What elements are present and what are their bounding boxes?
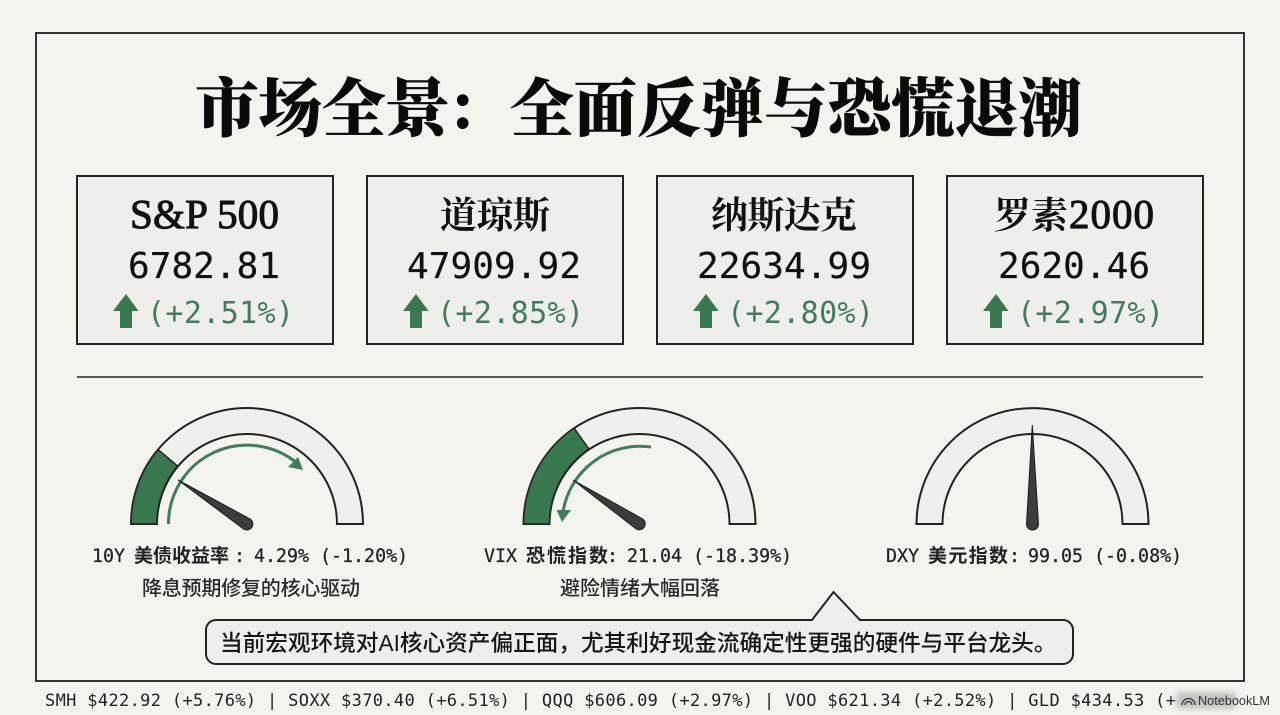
card: Nasdaq xyxy=(657,176,913,344)
card: Dow Jones xyxy=(367,176,623,344)
gauge label: DXY: 美元指数 xyxy=(928,541,1008,568)
watermark: NotebookLM xyxy=(1176,692,1270,709)
index value: Nasdaq: 22634.99 xyxy=(697,246,871,287)
index value: Dow Jones: 47909.92 xyxy=(407,246,581,287)
gauge label: DXY: : xyxy=(1009,546,1020,567)
gauge label: DXY: DXY xyxy=(886,546,919,567)
gauge label: 10Y yield xyxy=(92,541,408,568)
gauge label: VIX: 21.04 (-18.39%) xyxy=(627,546,792,567)
callout xyxy=(206,592,1073,664)
index name: Russell 2000: 罗素 xyxy=(994,185,1068,239)
change: S&P 500: (+2.51%) xyxy=(147,296,294,331)
index value: Russell 2000: 2620.46 xyxy=(998,246,1150,287)
index name: Russell 2000 xyxy=(994,185,1154,239)
watermark text: NotebookLM xyxy=(1198,694,1270,708)
gauge label: VIX: VIX xyxy=(484,546,517,567)
gauge note: VIX: 避险情绪大幅回落 xyxy=(560,572,720,601)
gauge: VIX xyxy=(523,408,756,530)
icon: up arrow xyxy=(693,294,718,328)
gauge label: DXY xyxy=(886,541,1182,568)
gauge: DXY xyxy=(916,408,1148,530)
change: Dow Jones: (+2.85%) xyxy=(437,296,584,331)
gauge label: VIX: : xyxy=(607,546,618,567)
ticker: SMH $422.92 (+5.76%) | SOXX $370.40 (+6.51%) | QQQ $606.09 (+2.97%) | VOO $621.34 (+2.52%) | GLD $434.53 (+ xyxy=(45,691,1176,711)
card: S&P 500 xyxy=(77,176,333,344)
callout text: 当前宏观环境对AI核心资产偏正面，尤其利好现金流确定性更强的硬件与平台龙头。 xyxy=(220,630,1056,656)
gauge label: 10Y yield: 4.29% (-1.20%) xyxy=(254,546,408,567)
change: Russell 2000: (+2.97%) xyxy=(1017,296,1164,331)
gauge label: 10Y yield: 美债收益率 xyxy=(134,541,229,568)
index name: S&P 500: S&P 500 xyxy=(130,191,279,237)
gauge label: 10Y yield: 10Y xyxy=(92,546,125,567)
index name: Dow Jones: 道琼斯 xyxy=(440,185,550,239)
gauge label: DXY: 99.05 (-0.08%) xyxy=(1028,546,1182,567)
gauge label: VIX: 恐慌指数 xyxy=(526,541,608,568)
title: : xyxy=(451,64,475,144)
index name: Russell 2000: 2000 xyxy=(1069,191,1154,237)
gauge label: 10Y yield: : xyxy=(234,546,245,567)
gauge label: VIX xyxy=(484,541,792,568)
title: 全面反弹与恐慌退潮 xyxy=(510,59,1082,150)
index name: Nasdaq: 纳斯达克 xyxy=(711,185,857,239)
gauge note: 10Y yield: 降息预期修复的核心驱动 xyxy=(142,572,360,601)
gauge: 10Y yield xyxy=(131,408,363,530)
title: 市场全景 xyxy=(195,59,451,150)
title xyxy=(195,59,1082,150)
icon: NotebookLM logo xyxy=(1182,698,1195,705)
card: Russell 2000 xyxy=(947,176,1203,344)
icon: up arrow xyxy=(403,294,428,328)
change: Nasdaq: (+2.80%) xyxy=(727,296,874,331)
index value: S&P 500: 6782.81 xyxy=(128,246,280,287)
icon: up arrow xyxy=(113,294,138,328)
icon: up arrow xyxy=(983,294,1008,328)
